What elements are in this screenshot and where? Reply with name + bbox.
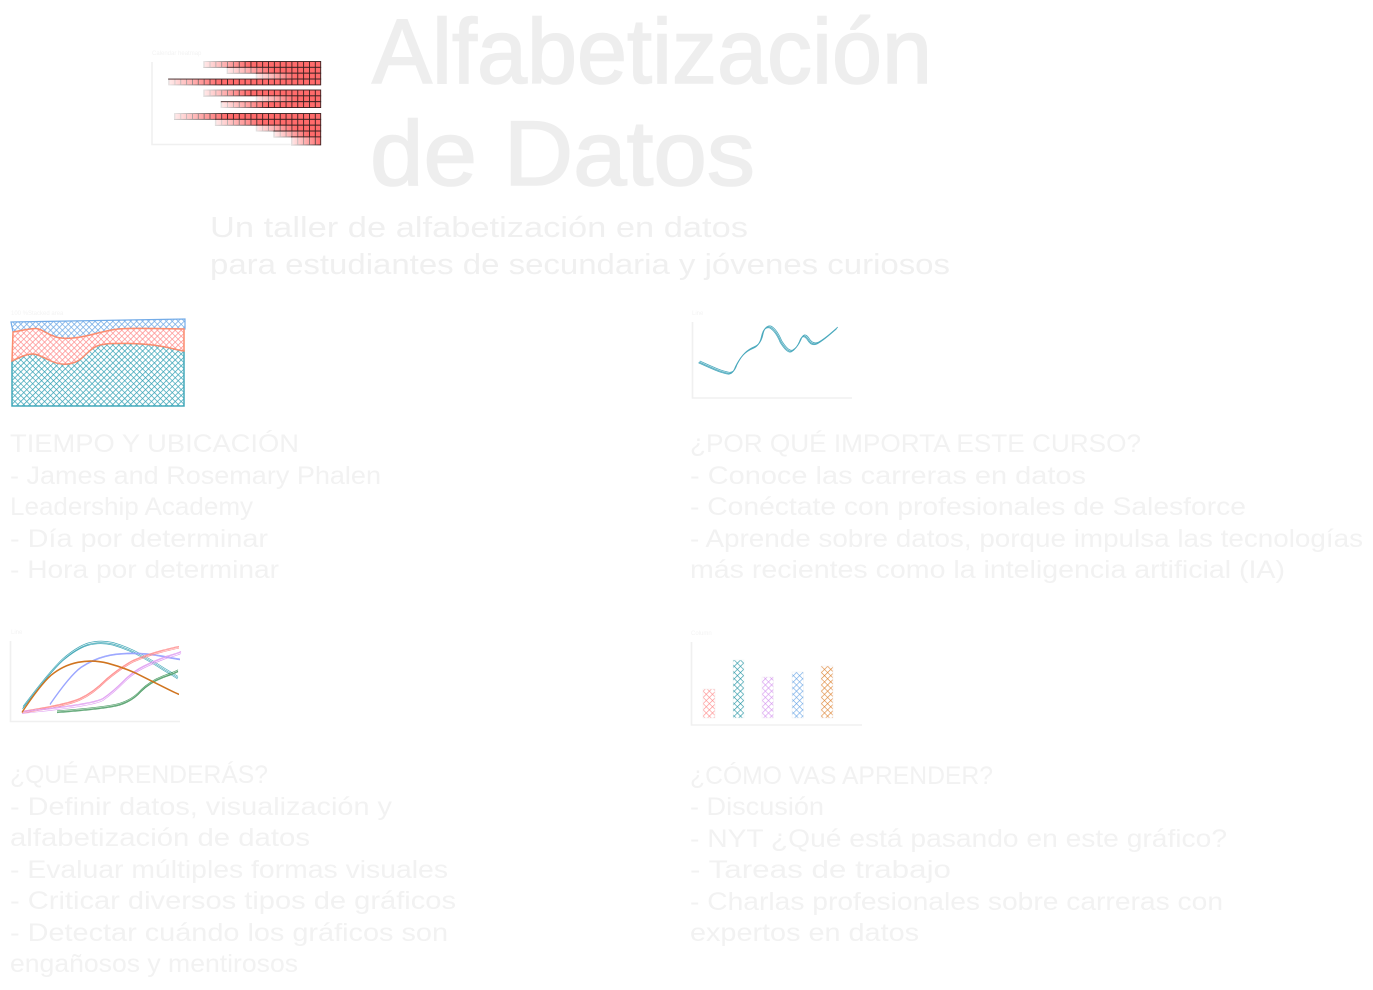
text: qué aprenderás: - Definir datos, visualización y [10,793,393,821]
area: blue [11,319,185,338]
text: qué aprenderás [10,760,456,978]
text: tiempo y ubicación: - Hora por determinar [10,556,279,584]
text: cómo vas a aprender: - Charlas profesionales sobre carreras con [690,888,1223,916]
chart: calendar heatmap: Calendar heatmap [152,51,202,57]
subtitle [210,212,950,281]
text: por qué importa: ¿POR QUÉ IMPORTA ESTE CURSO? [690,429,1141,458]
bar 5 [821,666,833,718]
text: cómo vas a aprender: - Tareas de trabajo [690,856,951,884]
text: cómo vas a aprender: expertos en datos [690,919,919,947]
bar 4 [792,672,804,718]
chart: single line: Line [692,311,704,317]
chart: multi line: Line [11,630,23,636]
text: tiempo y ubicación: TIEMPO Y UBICACIÓN [10,429,299,458]
line: orange [22,661,179,713]
subtitle: para estudiantes de secundaria y jóvenes curiosos [210,249,950,281]
line: green [57,670,178,713]
chart: single line [692,311,852,398]
text: qué aprenderás: engañosos y mentirosos [10,950,298,978]
text: por qué importa: - Aprende sobre datos, porque impulsa las tecnologías [690,525,1363,553]
title: de Datos [370,103,755,205]
chart: stacked area: 100 %Stacked area [11,311,64,317]
text: cómo vas a aprender: ¿CÓMO VAS APRENDER? [690,761,993,790]
text: cómo vas a aprender [690,761,1227,947]
line: violet [22,651,181,714]
chart: stacked area [11,311,185,406]
text: qué aprenderás: - Detectar cuándo los gráficos son [10,919,448,947]
text: por qué importa [690,429,1363,584]
text: tiempo y ubicación [10,429,381,584]
text: tiempo y ubicación: - James and Rosemary Phalen [10,462,381,490]
chart: column [691,631,862,725]
text: tiempo y ubicación: - Día por determinar [10,525,268,553]
chart: calendar heatmap [152,51,321,145]
subtitle: Un taller de alfabetización en datos [210,212,748,244]
text: cómo vas a aprender: - Discusión [690,793,824,821]
line: teal [22,641,178,709]
text: por qué importa: - Conéctate con profesionales de Salesforce [690,493,1246,521]
chart: column: Column [691,631,712,637]
text: tiempo y ubicación: Leadership Academy [10,493,254,521]
text: por qué importa: más recientes como la inteligencia artificial (IA) [690,556,1285,584]
text: qué aprenderás: alfabetización de datos [10,824,310,852]
bar 3 [762,677,774,718]
chart: multi line [10,630,181,722]
line: periwinkle [50,653,180,705]
text: por qué importa: - Conoce las carreras en datos [690,462,1086,490]
text: qué aprenderás: - Criticar diversos tipos de gráficos [10,887,456,915]
bar 2 [733,660,744,718]
title: Alfabetización [372,1,932,103]
line: salmon [22,646,179,713]
bar 1 [703,689,715,718]
area: teal [12,343,184,406]
text: cómo vas a aprender: - NYT ¿Qué está pasando en este gráfico? [690,825,1227,853]
text: qué aprenderás: - Evaluar múltiples formas visuales [10,856,448,884]
text: qué aprenderás: ¿QUÉ APRENDERÁS? [10,760,268,789]
area: red [12,328,184,364]
title [370,1,932,205]
